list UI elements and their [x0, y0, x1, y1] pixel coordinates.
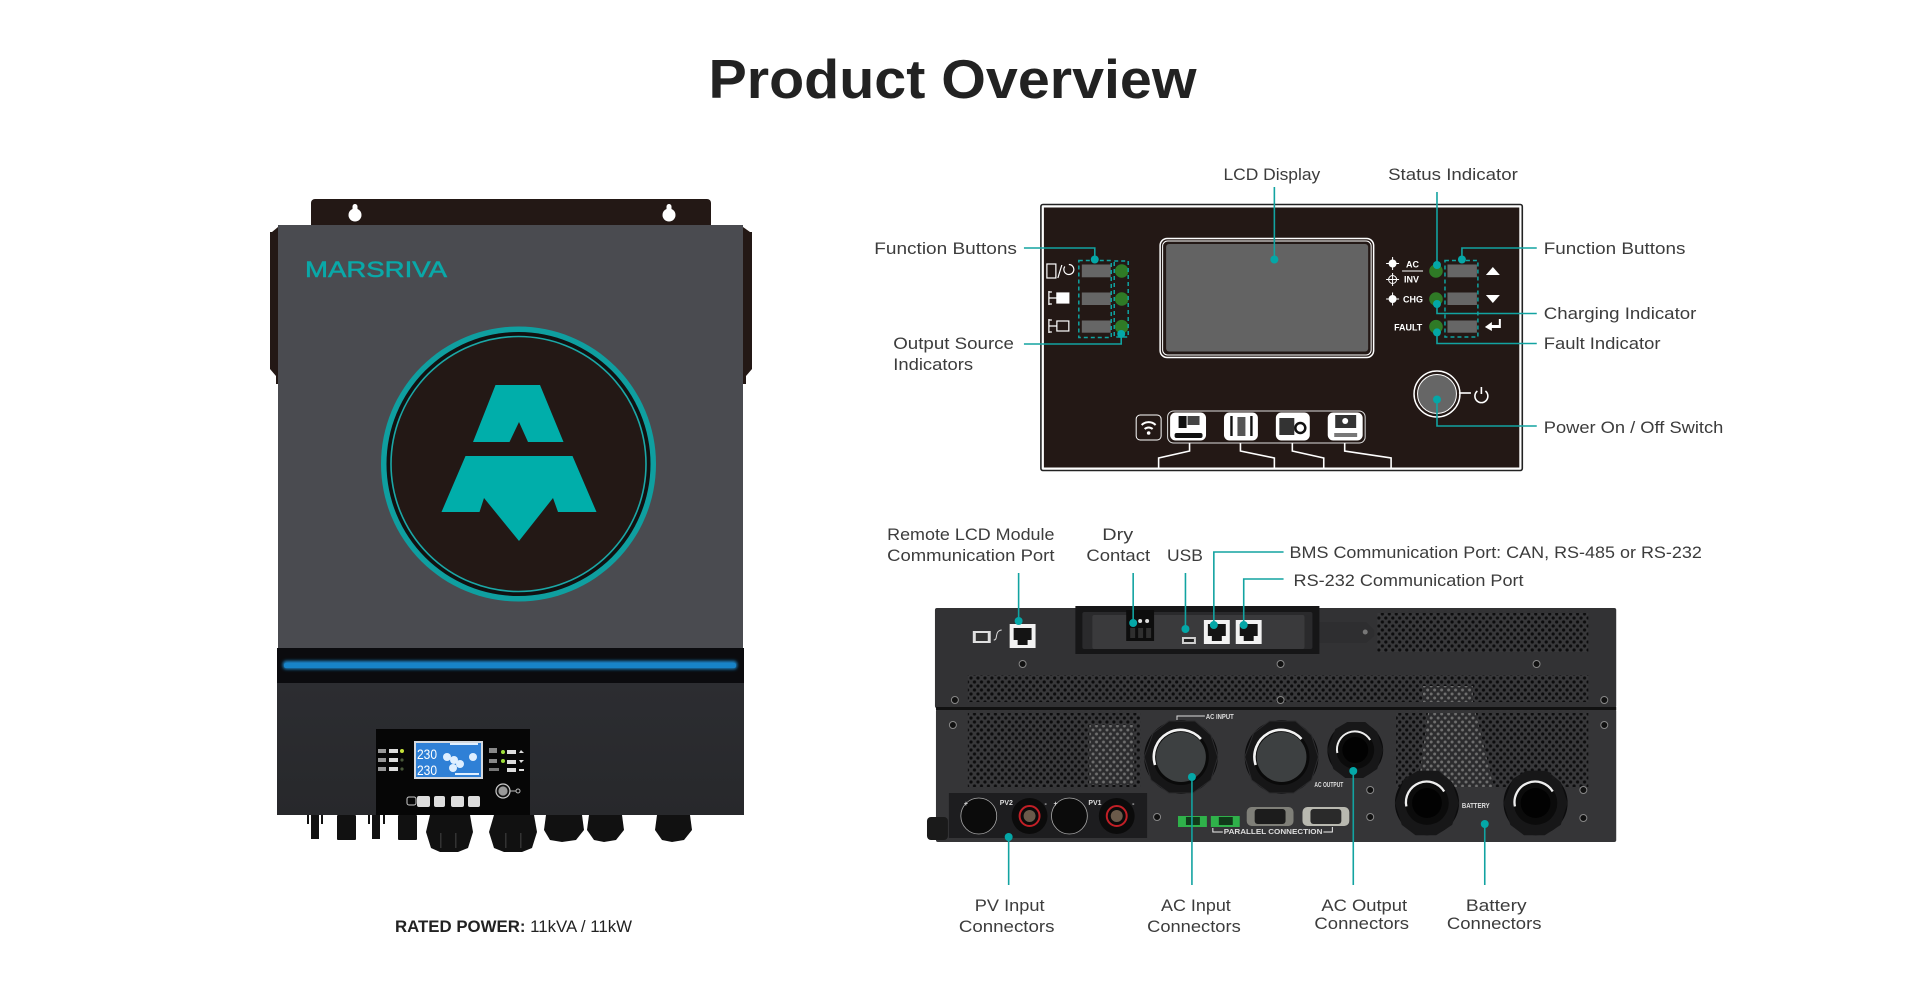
black light band: [277, 648, 744, 683]
callout: BMS port: [1210, 543, 1702, 629]
lower chassis screws: [949, 722, 1608, 822]
callout: dry contact: [1086, 525, 1150, 627]
callout: remote LCD port: [887, 525, 1055, 625]
screws: [951, 660, 1608, 704]
dry contact terminal: [1126, 610, 1154, 641]
callout: output source indicators: Indicators: [893, 355, 973, 374]
left function icons: [1047, 264, 1074, 333]
right status labels: AC: [1406, 259, 1420, 270]
callout: AC output: AC Output: [1321, 896, 1407, 915]
right status labels: CHG: [1403, 294, 1423, 305]
lower enclosure: [277, 683, 744, 815]
callout: status indicator: [1388, 165, 1518, 269]
callout: RS-232 port: RS-232 Communication Port: [1294, 571, 1524, 590]
callout: RS-232 port: [1240, 571, 1524, 629]
callout: AC input: Connectors: [1147, 917, 1241, 936]
USB port: [1182, 637, 1196, 644]
callout: USB: [1167, 546, 1203, 633]
callout: power switch: [1433, 396, 1723, 437]
silkscreen labels: [1177, 714, 1490, 810]
small touch keys: [407, 796, 480, 807]
communication module: [1075, 606, 1319, 654]
right buttons and LEDs: [489, 748, 524, 772]
right status labels: INV: [1404, 274, 1419, 285]
callout: power switch: Power On / Off Switch: [1544, 418, 1723, 437]
title: Product Overview: [708, 49, 1197, 110]
AC input and output cable glands: [1144, 720, 1383, 794]
brand wordmark: MARSRIVA: [305, 257, 447, 282]
circular logo badge: [381, 326, 656, 602]
callout: PV input: PV Input: [975, 896, 1045, 915]
small LCD screen: [414, 741, 483, 779]
power knob: [496, 784, 520, 798]
status LEDs: [1429, 264, 1443, 334]
left buttons and LEDs: [378, 749, 404, 771]
callout: battery: [1447, 820, 1542, 933]
PV connector plate: PV2: [1000, 800, 1013, 807]
panel body: [1041, 204, 1522, 470]
callout: right function buttons: Function Buttons: [1544, 239, 1685, 258]
wall mounting bracket: [311, 199, 711, 226]
right status labels: FAULT: [1394, 322, 1423, 333]
small LCD screen: 230: [417, 762, 437, 778]
panel diagram: rear connectors: [887, 525, 1702, 936]
right status labels: [1386, 257, 1423, 333]
callout: dry contact: Contact: [1086, 546, 1150, 565]
side mounting tabs: [270, 227, 752, 384]
PV connector plate: +: [964, 801, 968, 808]
callout: AC input: AC Input: [1161, 896, 1231, 915]
PV connector plate: -: [1132, 801, 1135, 808]
battery latch plate: [1319, 622, 1374, 643]
callout: charging indicator: [1433, 300, 1697, 323]
LCD screen: [1160, 238, 1374, 358]
callout: fault indicator: [1433, 328, 1661, 353]
callout: status indicator: Status Indicator: [1388, 165, 1518, 184]
lower chassis: [927, 707, 1616, 842]
bottom touch keys: [1136, 411, 1365, 443]
arrow icons: [1485, 267, 1501, 331]
callout: PV input: [959, 833, 1054, 936]
PV connector plate: +: [1053, 801, 1058, 808]
RJ45 ports: [1010, 620, 1262, 648]
callout: remote LCD port: Communication Port: [887, 546, 1055, 565]
callout: output source indicators: [893, 330, 1125, 374]
callout: AC input: [1147, 773, 1241, 936]
callout: LCD display: LCD Display: [1223, 165, 1321, 184]
callout: charging indicator: Charging Indicator: [1544, 304, 1697, 323]
PV connector plate: -: [1045, 801, 1048, 808]
remote LCD icon: [973, 630, 1002, 643]
callout: AC output: Connectors: [1314, 914, 1409, 933]
parallel connection ports: [1178, 807, 1349, 836]
PV connector plate: PV1: [1088, 800, 1102, 807]
small LCD screen: 230: [417, 746, 437, 762]
silkscreen labels: AC OUTPUT: [1314, 782, 1344, 789]
callout: LCD display: [1223, 165, 1321, 264]
PV and cable connectors: [307, 815, 692, 852]
callout: battery: Battery: [1466, 896, 1527, 915]
callout: BMS port: BMS Communication Port: CAN, RS-485 or RS-232: [1290, 543, 1702, 562]
callout: left function buttons: [874, 239, 1099, 264]
output source LEDs: [1114, 261, 1128, 337]
rated power caption: RATED POWER: 11kVA / 11kW: [395, 917, 632, 936]
upper enclosure: [278, 225, 743, 649]
battery cable glands: [1395, 771, 1568, 835]
front control panel: [376, 729, 530, 815]
callout: battery: Connectors: [1447, 914, 1542, 933]
key leader lines: [1159, 443, 1391, 468]
power switch: [1414, 371, 1488, 417]
callout: dry contact: Dry: [1102, 525, 1134, 544]
panel diagram: control panel: [874, 165, 1723, 471]
right function buttons: [1445, 260, 1478, 337]
silkscreen labels: AC INPUT: [1206, 714, 1234, 721]
callout: AC output: [1314, 767, 1409, 933]
callout: output source indicators: Output Source: [893, 334, 1014, 353]
inverter front view: [270, 199, 752, 852]
callout: fault indicator: Fault Indicator: [1544, 334, 1661, 353]
parallel connection ports: PARALLEL CONNECTION: [1224, 829, 1322, 836]
PV connector plate: [949, 793, 1147, 838]
silkscreen labels: BATTERY: [1462, 803, 1490, 810]
callout: USB: USB: [1167, 546, 1203, 565]
left function buttons: [1079, 260, 1111, 338]
callout: remote LCD port: Remote LCD Module: [887, 525, 1054, 544]
callout: right function buttons: [1458, 239, 1685, 264]
callout: PV input: Connectors: [959, 917, 1054, 936]
upper chassis: [935, 608, 1616, 708]
callout: left function buttons: Function Buttons: [874, 239, 1017, 258]
